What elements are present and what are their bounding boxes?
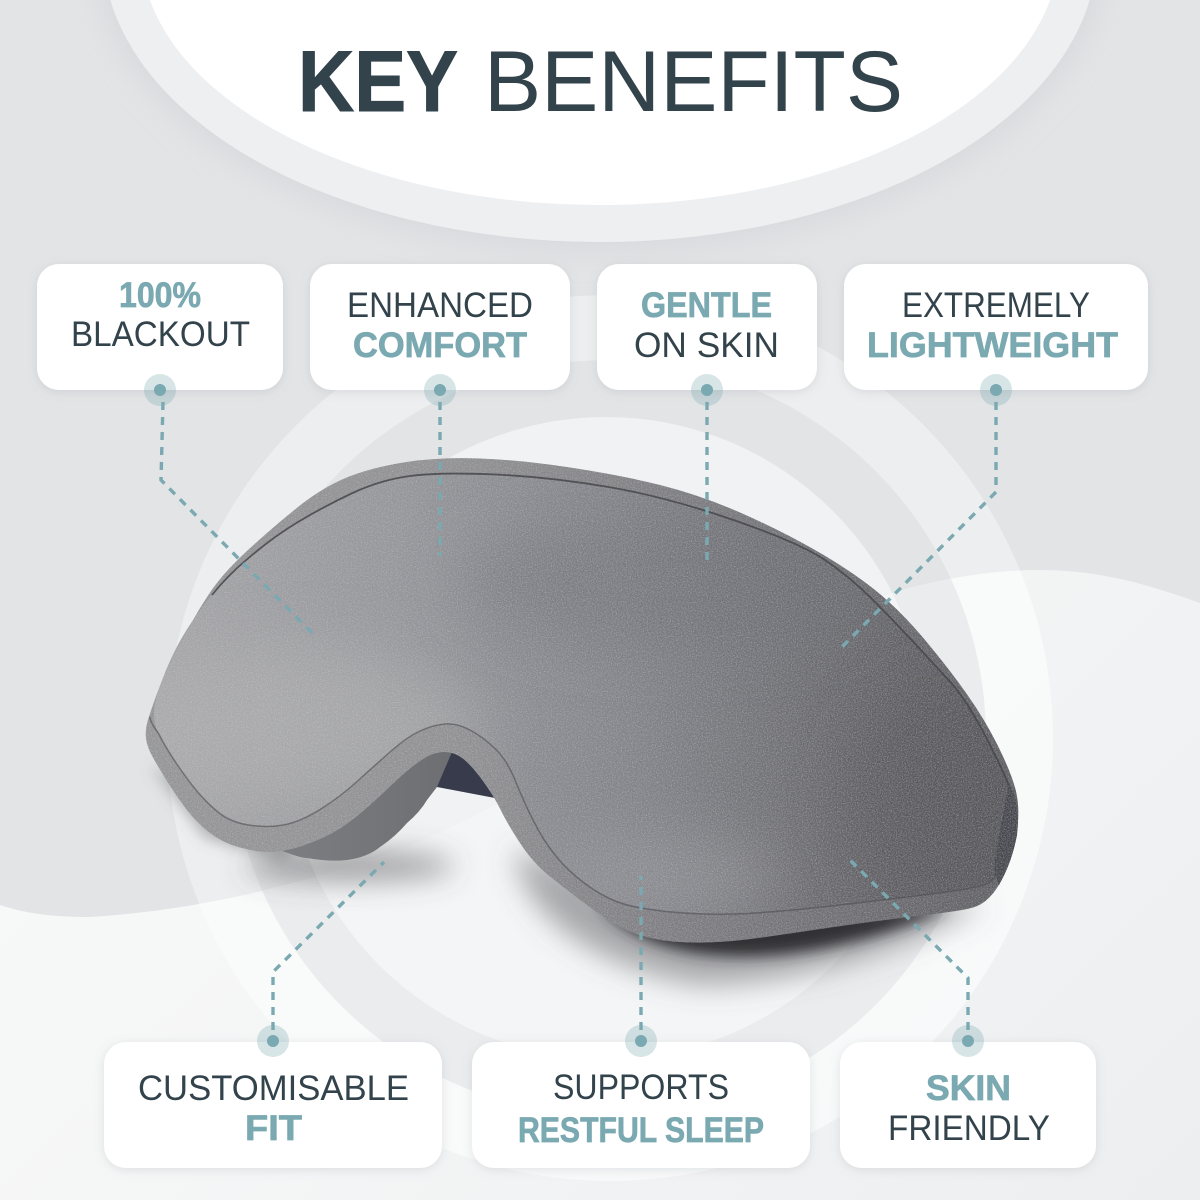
card: enhanced comfort bbox=[310, 264, 570, 406]
light wave in the lower background bbox=[0, 570, 1200, 1200]
card: 100% blackout: BLACKOUT bbox=[71, 315, 250, 354]
card: gentle on skin: ON SKIN bbox=[634, 326, 779, 365]
card: 100% blackout: 100% bbox=[119, 276, 201, 315]
fabric grain bbox=[140, 450, 1030, 950]
mask edge binding bbox=[146, 458, 1018, 943]
connector: gentle on skin bbox=[705, 402, 709, 562]
under pad bbox=[280, 735, 456, 861]
product: grey sleep mask bbox=[120, 450, 1030, 985]
connector: supports restful sleep bbox=[639, 876, 643, 1030]
card: customisable fit bbox=[104, 1025, 442, 1168]
card: 100% blackout bbox=[37, 264, 283, 406]
connector: customisable fit bbox=[273, 862, 384, 1030]
card: supports restful sleep: SUPPORTS bbox=[553, 1068, 729, 1107]
connector: enhanced comfort bbox=[438, 402, 442, 556]
connector: extremely lightweight bbox=[840, 402, 996, 649]
card: enhanced comfort: COMFORT bbox=[353, 326, 527, 365]
connector: skin friendly bbox=[850, 860, 968, 1030]
card: skin friendly: FRIENDLY bbox=[888, 1109, 1050, 1148]
title bbox=[298, 34, 903, 130]
shadows under the mask bbox=[150, 765, 985, 985]
card: customisable fit: CUSTOMISABLE bbox=[138, 1069, 409, 1108]
card: supports restful sleep bbox=[472, 1025, 810, 1168]
title: KEY bbox=[298, 34, 458, 130]
card: extremely lightweight bbox=[844, 264, 1148, 406]
title: BENEFITS bbox=[484, 34, 903, 130]
lower seam stitch bbox=[150, 717, 995, 914]
mask face bbox=[154, 498, 1008, 914]
card: skin friendly bbox=[840, 1025, 1096, 1168]
strap bbox=[437, 745, 495, 798]
card: extremely lightweight: EXTREMELY bbox=[902, 286, 1090, 325]
card: customisable fit: FIT bbox=[245, 1109, 302, 1148]
connector: 100% blackout bbox=[161, 402, 315, 636]
card: gentle on skin bbox=[597, 264, 817, 406]
header shape: top ellipse bbox=[95, 0, 1105, 252]
card: enhanced comfort: ENHANCED bbox=[347, 286, 533, 325]
upper seam stitch bbox=[212, 474, 1008, 785]
dark side strip bbox=[993, 782, 1018, 885]
card: gentle on skin: GENTLE bbox=[641, 286, 772, 325]
card: skin friendly: SKIN bbox=[926, 1069, 1011, 1108]
card: supports restful sleep: RESTFUL SLEEP bbox=[518, 1111, 764, 1150]
concentric circles behind the mask bbox=[167, 295, 1053, 1181]
card: extremely lightweight: LIGHTWEIGHT bbox=[867, 326, 1118, 365]
